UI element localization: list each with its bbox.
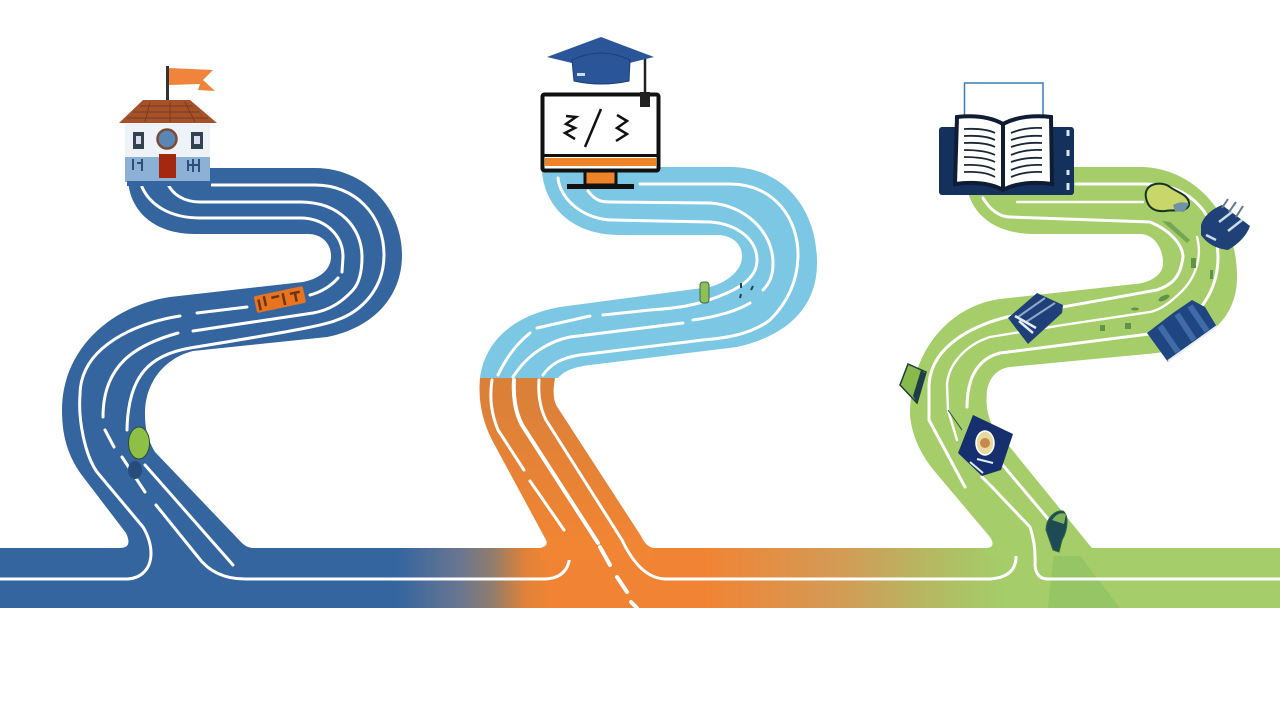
- bottom horizontal road with gradient: [0, 548, 1280, 608]
- icon: small green tag on light blue road: [700, 282, 753, 303]
- road: blue path: [0, 168, 570, 579]
- road: orange section: [480, 378, 1016, 608]
- icon: light bulb: [1146, 184, 1189, 212]
- scattered marks on green road: [1100, 221, 1213, 331]
- icon: open book with blue frame: [939, 83, 1074, 195]
- icon: small green book: [900, 364, 926, 403]
- icon: blue book on green road: [1008, 293, 1063, 344]
- icon: dark green leaf marker: [1046, 511, 1067, 552]
- icon: computer monitor: [542, 92, 658, 189]
- icon: school house with flag: [119, 66, 217, 186]
- icon: green marker on blue road: [128, 427, 150, 479]
- icon: blue badge certificate: [948, 410, 1013, 476]
- icon: graduation cap: [547, 37, 654, 95]
- road: light blue path: [480, 167, 817, 378]
- icon: orange vehicle on blue road: [254, 286, 306, 313]
- icon: blue device: [1201, 199, 1250, 250]
- road: green path: [910, 167, 1280, 579]
- icon: open blue book on green road: [1147, 300, 1217, 362]
